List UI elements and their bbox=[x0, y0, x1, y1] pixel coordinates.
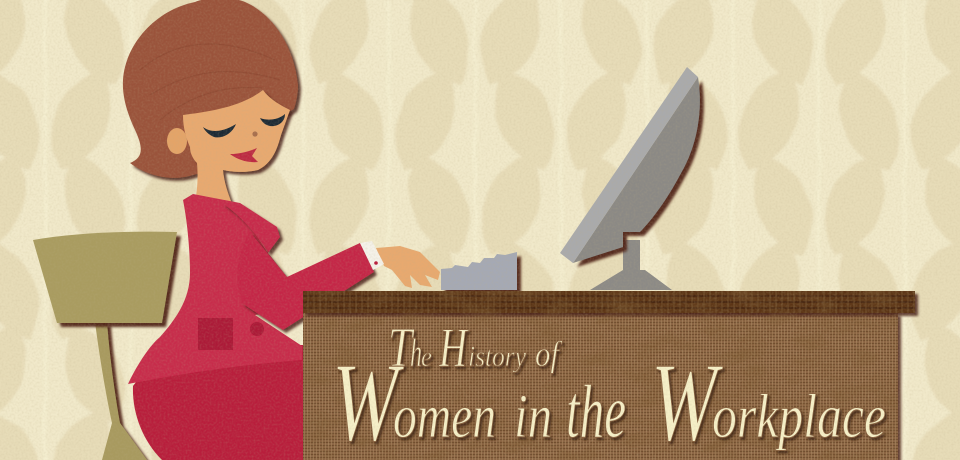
monitor stand bbox=[590, 240, 672, 290]
hair strands bbox=[140, 44, 280, 120]
typewriter bbox=[441, 252, 517, 290]
collar bbox=[222, 203, 280, 253]
cuff button bbox=[374, 261, 378, 265]
title line: Women in the Workplace: the bbox=[566, 370, 626, 454]
desk top bbox=[303, 291, 915, 313]
desk mottling bbox=[303, 291, 898, 460]
title line: Women in the Workplace: omen bbox=[393, 383, 496, 451]
lips bbox=[230, 148, 258, 162]
desk front bbox=[303, 313, 898, 460]
left closed eye bbox=[203, 124, 236, 137]
title line: The History of: istory bbox=[468, 340, 527, 373]
ear bbox=[167, 128, 187, 154]
title line: The History of: h bbox=[410, 330, 422, 375]
nose bbox=[252, 131, 258, 137]
title bbox=[332, 317, 886, 460]
title line: The History of bbox=[388, 317, 563, 379]
desk bbox=[303, 291, 915, 460]
title line: The History of: of bbox=[535, 334, 563, 374]
chair bbox=[33, 232, 177, 460]
title line: Women in the Workplace: in bbox=[514, 383, 552, 451]
face and neck bbox=[183, 90, 290, 206]
woman bbox=[123, 0, 440, 460]
title line: The History of: e bbox=[421, 342, 432, 373]
dress bodice bbox=[128, 194, 302, 384]
pocket bbox=[198, 318, 233, 350]
chair post and base bbox=[95, 322, 147, 460]
sleeve bbox=[237, 232, 374, 330]
right closed eye bbox=[260, 114, 285, 126]
hair bbox=[123, 0, 298, 178]
monitor screen edge bbox=[560, 67, 698, 263]
shirt cuff bbox=[360, 241, 384, 270]
title line: The History of: T bbox=[388, 317, 415, 379]
hand bbox=[376, 246, 440, 288]
monitor back bbox=[573, 77, 700, 263]
chair back bbox=[33, 232, 177, 323]
monitor bbox=[560, 67, 700, 290]
title line: The History of: H bbox=[438, 317, 469, 379]
title line: Women in the Workplace bbox=[332, 341, 886, 460]
skirt bbox=[133, 345, 303, 460]
title line: Women in the Workplace: orkplace bbox=[712, 383, 886, 451]
coat button bbox=[250, 322, 264, 336]
